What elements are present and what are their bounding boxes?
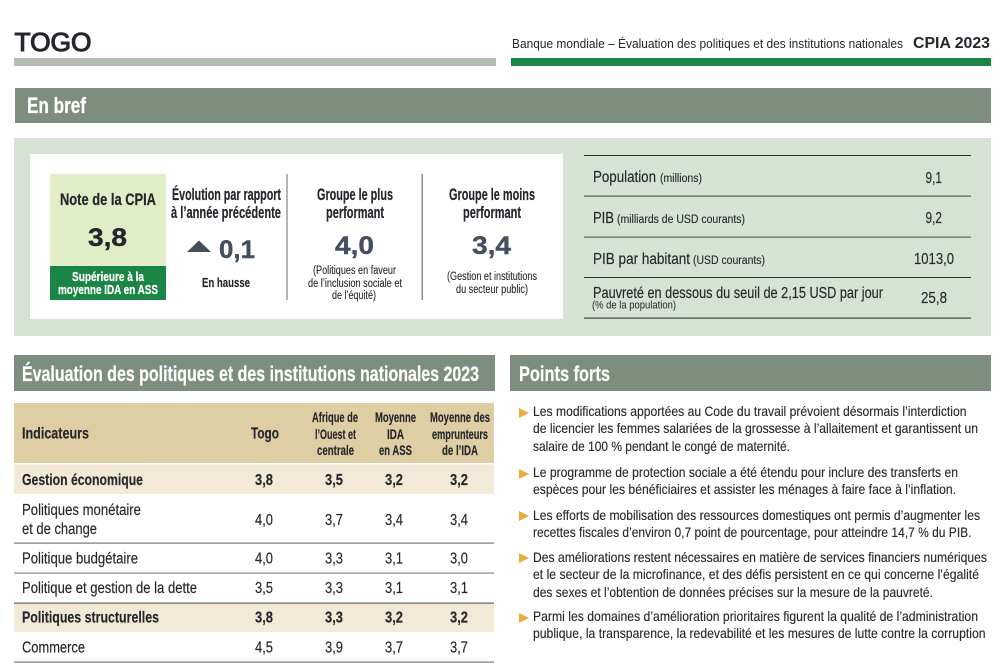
row: Politique et gestion de la dette xyxy=(22,580,468,597)
row: Politiques structurelles: Politiques structurelles xyxy=(22,610,159,626)
best performing group: de l’équité) xyxy=(332,290,376,302)
country title: TOGO xyxy=(14,27,92,57)
bullet: Code du travail xyxy=(519,403,978,454)
bullet: Code du travail: salaire de 100 % pendant le congé de maternité. xyxy=(533,438,790,454)
icon: up triangle xyxy=(187,240,211,252)
table header row: emprunteurs xyxy=(432,427,488,442)
worst performing group: Groupe le moins xyxy=(449,186,535,204)
row: Politique et gestion de la dette: 3,5 xyxy=(255,580,273,597)
stat: population: Population xyxy=(593,169,656,186)
stat: poverty xyxy=(592,285,947,312)
CPIA score box: Note de la CPIA xyxy=(60,191,156,209)
change from previous year: En hausse xyxy=(202,275,250,290)
grey header rule xyxy=(14,58,496,66)
panel: Points forts bullet list xyxy=(519,403,987,641)
row: Politiques structurelles: 3,2 xyxy=(450,610,468,626)
row: Politiques monétaire et de change: 4,0 xyxy=(255,512,273,529)
row: Gestion économique: 3,5 xyxy=(325,472,343,489)
row: Politiques structurelles: 3,3 xyxy=(325,610,343,626)
row: Commerce: 3,9 xyxy=(325,640,343,656)
stat: GDP: 9,2 xyxy=(926,210,942,227)
bullet: domaines prioritaires xyxy=(519,608,986,641)
row: Politiques structurelles: 3,2 xyxy=(385,610,403,626)
worst performing group: du secteur public) xyxy=(456,284,528,296)
stat: poverty: Pauvreté en dessous du seuil de 2,15 USD par jour xyxy=(593,285,884,302)
row: Politique budgétaire: 3,1 xyxy=(385,550,403,568)
row: Politiques monétaire et de change: 3,4 xyxy=(385,512,403,529)
table header row: en ASS xyxy=(379,443,412,458)
bullet: services financiers xyxy=(519,549,987,600)
row: Politique et gestion de la dette: 3,1 xyxy=(385,580,403,597)
stat: GDP per capita: PIB par habitant xyxy=(593,251,690,268)
stat: GDP per capita: 1013,0 xyxy=(914,251,954,268)
row: Politique budgétaire xyxy=(14,550,494,574)
stat: GDP per capita xyxy=(593,251,954,268)
heading: CPIA table: Évaluation des politiques et des institutions nationales 2023 xyxy=(22,361,479,386)
row: Politiques monétaire et de change: et de change xyxy=(22,521,97,538)
CPIA indicators table xyxy=(14,403,494,663)
worst performing group: (Gestion et institutions xyxy=(447,271,537,283)
row: Gestion économique: Gestion économique xyxy=(22,472,143,489)
best performing group xyxy=(308,186,403,302)
row: Politiques monétaire et de change: 3,4 xyxy=(450,512,468,529)
change from previous year: Évolution par rapport xyxy=(172,185,281,204)
row: Politiques monétaire et de change xyxy=(14,502,494,544)
row: Gestion économique: 3,2 xyxy=(385,472,403,489)
table header row: centrale xyxy=(317,443,354,458)
publication subtitle: Banque mondiale – Évaluation des politiques et des institutions nationales xyxy=(512,36,903,51)
bullet: ressources domestiques xyxy=(519,507,980,540)
stat: GDP: (milliards de USD courants) xyxy=(617,214,745,226)
stat: GDP per capita: (USD courants) xyxy=(693,255,765,267)
row: Commerce: 3,7 xyxy=(450,640,468,656)
row: Politique budgétaire: Politique budgétaire xyxy=(22,550,138,568)
heading: En bref: En bref xyxy=(27,93,87,118)
row: Politiques monétaire et de change: Politiques monétaire xyxy=(22,502,141,519)
change from previous year: 0,1 xyxy=(219,236,255,264)
row: Commerce: Commerce xyxy=(22,640,85,656)
stat: population: (millions) xyxy=(660,173,702,185)
row: Politiques monétaire et de change: 3,7 xyxy=(325,512,343,529)
CPIA score box: Supérieure à la xyxy=(72,269,145,284)
table header row: de l’IDA xyxy=(442,443,478,458)
row: Politique et gestion de la dette: Politique et gestion de la dette xyxy=(22,580,197,597)
page header xyxy=(14,27,991,66)
stat: GDP xyxy=(593,210,942,227)
row: Politique et gestion de la dette: 3,1 xyxy=(450,580,468,597)
CPIA year: CPIA 2023 xyxy=(913,35,990,52)
best performing group: 4,0 xyxy=(335,232,374,260)
green header rule xyxy=(511,58,991,66)
row: Gestion économique: 3,2 xyxy=(450,472,468,489)
row: Politiques structurelles xyxy=(14,602,494,632)
table header row: l’Ouest et xyxy=(315,427,356,442)
bullet: protection sociale xyxy=(519,464,958,497)
heading: CPIA table xyxy=(14,355,495,391)
best performing group: performant xyxy=(326,204,384,222)
best performing group: de l’inclusion sociale et xyxy=(308,278,403,290)
stat: population: 9,1 xyxy=(926,170,942,187)
CPIA score box: moyenne IDA en ASS xyxy=(58,282,158,297)
stat: poverty: 25,8 xyxy=(921,290,947,307)
table header row: Indicateurs xyxy=(22,426,89,442)
worst performing group: performant xyxy=(463,204,521,222)
white score card xyxy=(30,154,563,319)
row: Politique et gestion de la dette: 3,3 xyxy=(325,580,343,597)
row: Politique budgétaire: 4,0 xyxy=(255,550,273,568)
heading: En bref xyxy=(15,88,991,123)
CPIA score box: 3,8 xyxy=(88,224,127,252)
bullet: services financiers: des sexes et l’obtention de données précises sur la mesure de la pauvreté. xyxy=(533,584,933,600)
table header row: Togo xyxy=(251,426,279,442)
row: Commerce: 4,5 xyxy=(255,640,273,656)
table header row: IDA xyxy=(387,427,404,442)
panel: En bref xyxy=(14,138,991,336)
change from previous year xyxy=(171,185,281,290)
stat: poverty: (% de la population) xyxy=(592,300,676,312)
stat: GDP: PIB xyxy=(593,210,614,227)
best performing group: Groupe le plus xyxy=(317,186,393,204)
table header row: Moyenne des xyxy=(430,410,490,425)
heading: Points forts: Points forts xyxy=(519,362,610,386)
worst performing group xyxy=(447,186,537,296)
row: Gestion économique: 3,8 xyxy=(255,472,273,489)
row: Commerce xyxy=(14,640,494,663)
table header row: Afrique de xyxy=(312,410,358,425)
heading: Points forts xyxy=(510,355,991,391)
row: Politique budgétaire: 3,3 xyxy=(325,550,343,568)
change from previous year: à l’année précédente xyxy=(171,204,281,222)
table header row xyxy=(14,403,494,463)
worst performing group: 3,4 xyxy=(472,232,511,260)
row: Commerce: 3,7 xyxy=(385,640,403,656)
key statistics table xyxy=(584,155,971,319)
best performing group: (Politiques en faveur xyxy=(313,265,396,277)
row: Politique budgétaire: 3,0 xyxy=(450,550,468,568)
bullet: protection sociale: espèces pour les bénéficiaires et assister les ménages à faire face à l’inflation. xyxy=(533,481,956,497)
CPIA score box xyxy=(50,174,166,300)
row: Gestion économique xyxy=(14,464,494,494)
table header row: Moyenne xyxy=(375,410,416,425)
row: Politiques structurelles: 3,8 xyxy=(255,610,273,626)
stat: population xyxy=(593,169,942,187)
